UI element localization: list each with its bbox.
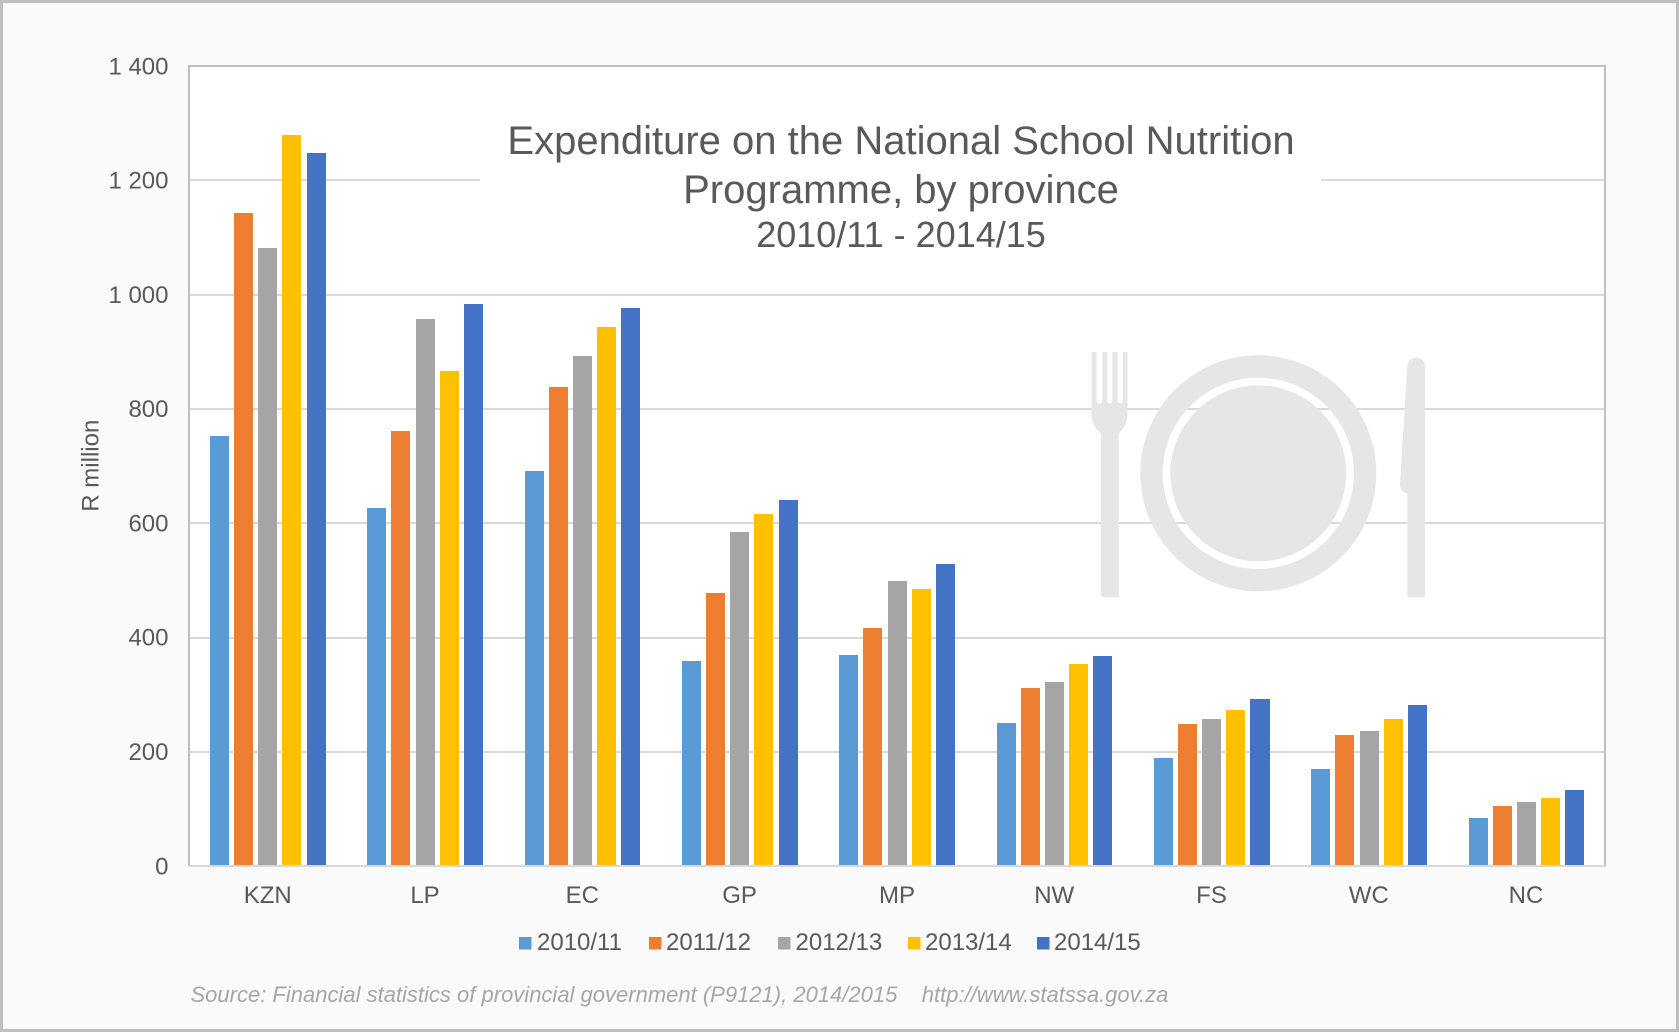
bar chart	[210, 135, 1584, 865]
source note: Source: Financial statistics of provincial government (P9121), 2014/2015 http://www.statssa.gov.za	[190, 982, 1168, 1007]
legend: 2010/11	[537, 929, 622, 956]
bars: GP	[682, 500, 798, 865]
y axis tick labels	[108, 54, 168, 880]
bars: FS	[1154, 699, 1270, 865]
icon: fork	[1092, 352, 1128, 597]
x axis category labels: MP	[879, 882, 915, 909]
icon: plate	[1151, 366, 1365, 580]
bars: EC	[525, 308, 640, 865]
y axis title: R million	[78, 420, 104, 512]
y axis tick labels: 400	[128, 625, 168, 652]
legend: 2011/12	[666, 929, 751, 956]
legend: 2014/15	[1054, 929, 1141, 956]
icon: knife	[1400, 358, 1425, 597]
legend: 2012/13	[796, 929, 882, 956]
title background mask	[480, 118, 1321, 262]
y axis tick labels: 1 200	[108, 168, 168, 195]
bars: NW	[997, 656, 1112, 865]
bars: LP	[367, 304, 483, 865]
bars: MP	[839, 564, 955, 865]
bars: WC	[1311, 705, 1427, 865]
y axis tick labels: 800	[128, 396, 168, 423]
bars: KZN	[210, 135, 326, 865]
y axis tick labels: 0	[155, 853, 168, 880]
legend: 2013/14	[925, 929, 1012, 956]
title: Programme, by province	[683, 168, 1119, 212]
title: 2010/11 - 2014/15	[756, 214, 1046, 255]
y axis tick labels: 600	[128, 510, 168, 538]
y axis tick labels: 1 000	[108, 282, 168, 309]
x axis category labels: LP	[410, 882, 440, 909]
y axis tick labels: 200	[128, 739, 168, 766]
x axis category labels: KZN	[244, 882, 292, 909]
x axis category labels: NW	[1034, 882, 1075, 909]
x axis category labels: WC	[1349, 882, 1389, 909]
icon: plate and cutlery	[1092, 352, 1425, 597]
title	[507, 119, 1295, 255]
title: Expenditure on the National School Nutrition	[507, 119, 1295, 163]
x axis category labels	[244, 882, 1543, 909]
x axis category labels: GP	[722, 882, 757, 909]
x axis category labels: NC	[1509, 882, 1543, 909]
x axis category labels: EC	[566, 882, 599, 909]
legend	[519, 929, 1141, 956]
x axis category labels: FS	[1196, 882, 1227, 909]
bars: NC	[1469, 790, 1584, 865]
plot area	[189, 66, 1605, 866]
y axis tick labels: 1 400	[108, 54, 168, 80]
